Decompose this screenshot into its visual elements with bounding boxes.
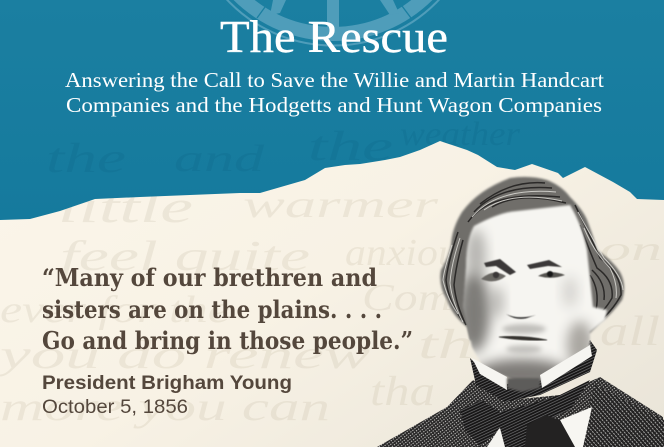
coat: [377, 377, 663, 447]
handwriting on paper: Com: [362, 277, 452, 319]
collar: [472, 358, 507, 390]
handwriting on paper: tha: [370, 369, 435, 415]
subtitle: [65, 68, 604, 117]
face shading: [458, 272, 490, 352]
nose: [506, 314, 536, 319]
handwriting on teal band: [431, 142, 450, 145]
attribution: President Brigham Young: [42, 372, 292, 394]
portrait of Brigham Young: [377, 177, 664, 447]
handwriting on paper: th: [418, 322, 473, 368]
mouth: [499, 336, 547, 340]
attribution: October 5, 1856: [42, 396, 188, 418]
title: The Rescue: [220, 12, 448, 62]
hair: [440, 177, 624, 340]
quote: “Many of our brethren and: [42, 263, 377, 292]
shirt: [560, 407, 592, 447]
scarf and bow: [470, 340, 597, 402]
teal header band with torn mountain edge: [0, 0, 664, 220]
handwriting on paper: anxious: [345, 232, 475, 274]
handwriting on paper: [0, 181, 662, 429]
icon: wagon wheel: [188, 0, 478, 46]
attribution: [42, 372, 292, 418]
handwriting on teal band: weather: [400, 116, 521, 153]
handwriting on paper: warmer: [243, 184, 438, 226]
handwriting on teal band: the: [308, 124, 393, 170]
eyes: [481, 273, 506, 281]
handwriting on teal band: the: [46, 136, 126, 182]
handwriting on paper: all: [600, 309, 660, 355]
brows: [484, 259, 516, 275]
quote: sisters are on the plains. . . .: [42, 295, 382, 324]
subtitle: Companies and the Hodgetts and Hunt Wagon Companies: [66, 93, 602, 117]
handwriting on teal band: and: [174, 138, 266, 180]
subtitle: Answering the Call to Save the Willie and Martin Handcart: [65, 68, 604, 92]
quote: [42, 263, 413, 355]
quote: Go and bring in those people.”: [42, 326, 413, 355]
face: [462, 204, 608, 382]
handwriting on paper: on: [600, 231, 662, 268]
handwriting on paper: you do renew: [0, 332, 371, 377]
handwriting on paper: feel quite: [60, 234, 310, 280]
handwriting on paper: ever for the: [0, 289, 230, 331]
handwriting on paper: little: [58, 181, 193, 232]
handwriting on paper: more you can: [0, 384, 330, 429]
